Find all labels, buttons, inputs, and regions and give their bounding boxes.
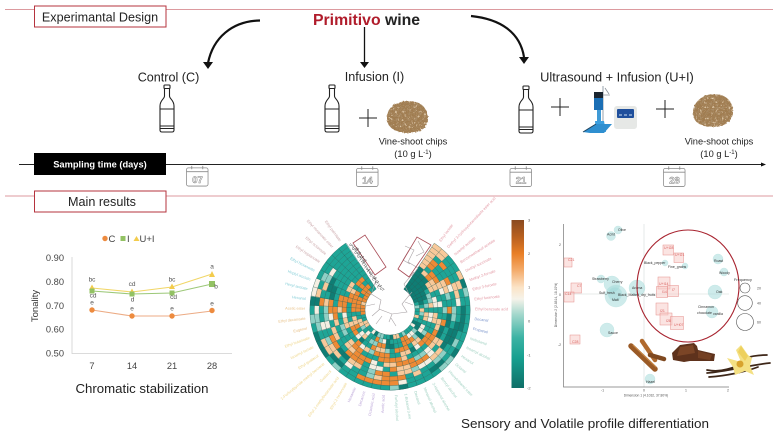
attribute labels: Black_Malted_dry_fruits [618,293,656,297]
heading: Main results [34,191,166,212]
significance letters: b [214,284,218,290]
line chart: tonality [30,234,232,371]
significance letters: cd [170,294,177,301]
icon: ultrasound homogenizer [583,86,637,133]
compound labels: left half: Ethyl octanoate [304,236,327,256]
icon: infusion bottle [325,85,339,132]
icon: chocolate pieces [672,343,715,362]
compound labels: right half: Benzeneethanol acetate [459,239,496,264]
icon: plus [551,98,569,116]
compound labels: left half: Isoamyl lactate [290,345,314,360]
significance letters: e [210,300,214,308]
chart legend [102,234,155,245]
heading: Main results: Main results [68,195,136,209]
sample codes: U+I21 [675,253,684,257]
sample codes [565,246,684,344]
significance letters: bc [169,276,176,284]
compound labels: left half: Hexanoic [347,387,357,403]
sample labels: C 21 [371,277,380,285]
caption: Chromatic stabilization: Chromatic stabilization [76,382,209,396]
label: chips dose (U+I): (10 g L [700,149,738,159]
frequency legend [734,278,761,330]
compound labels: right half: Diethyl 3-hydroxybutanedioate ester acid [446,196,497,249]
sample codes: U+I28 [664,246,673,250]
compound labels: left half [278,219,386,418]
x axis tick labels: 7 [89,361,95,371]
compound labels: left half: Ethyl butanoate [284,336,310,349]
compound labels: left half: Octanoic acid [368,393,376,416]
compound labels: left half: Eugenol [293,326,308,334]
attribute labels: Roast [714,259,723,263]
compound labels: right half: Ethyl lactate [439,224,454,243]
attribute labels: Oak [716,290,723,294]
axis tick labels: 0 [643,388,645,392]
teal attribute bubbles [597,226,728,384]
label: Control: Control (C) [138,70,199,84]
icon: calendar day 21: 21 [516,176,527,186]
series: C [89,307,215,319]
compound labels: left half: Ethyl guaiacol [297,354,320,370]
attribute labels: vanilla [713,312,723,316]
heatmap colour bar [512,218,531,390]
x axis tick labels [89,361,217,371]
heatmap colour bar: 2 [528,251,531,256]
red highlight ellipse [637,230,739,342]
x axis tick labels: 14 [127,361,137,371]
frequency legend: 40 [757,302,761,306]
arrow: to ultrasound + infusion [471,16,529,64]
axis tick labels: 2 [559,243,561,247]
icon: vanilla flower and pods [707,345,770,377]
y axis title: Tonality [30,290,41,322]
sample codes: I7 [672,288,675,292]
frequency legend: Frequency [734,278,752,282]
central dendrogram [366,241,424,326]
red sample squares [564,245,684,344]
reference lines [564,224,729,387]
axes [72,257,232,354]
significance letters: e [130,306,134,312]
compound labels: left half: Heptyl acetate [287,269,311,282]
sample labels: I 07 [366,269,373,276]
compound labels: right half: Isoamyl alcohol [465,346,491,361]
sample codes: C14 [565,292,571,296]
compound labels: right half: 2-Heptanol alcohol [431,382,451,412]
sample codes: C21 [568,258,574,262]
attribute labels: Sauce [608,331,618,335]
compound labels: right half: Ethyl 3-furoate [472,282,497,292]
sample labels: U+I 21 [351,246,362,256]
title: Primitivo wine: Primitivo wine [313,12,420,29]
compound labels: left half: Acetic acid [381,395,386,413]
compound labels: left half: Ethyl nonanoate ester [306,219,334,249]
attribute labels: Strawberry [592,277,609,281]
x axis tick labels: 28 [207,361,217,371]
compound labels: left half: Ethyl 2-methylbutanoate acid [307,376,340,418]
compound labels: right half: Octanol [454,363,467,374]
attribute labels: Acrid [607,232,615,236]
sample labels: C 14 [374,281,382,288]
compound labels: left half: Guaiacol [319,369,332,383]
icon: calendar day 14 [356,166,378,187]
axis tick labels: -1 [601,388,604,392]
significance letters: a [210,264,214,270]
label: chips dose (infusion): Vine-shoot chips [379,136,448,146]
heatmap colour bar: 1 [528,284,531,290]
compound labels: left half: Hexyl acetate [285,282,308,291]
significance letters: e [170,306,174,312]
sample codes: U+I07 [674,323,683,327]
scatter plot: sensory map [554,224,761,398]
y axis tick labels: 0.80 [46,277,64,287]
axis tick labels: 1 [685,388,687,392]
compound labels: right half: Ethyl furanoate [474,295,500,301]
significance letters: cd [90,292,97,300]
attribute labels: Fine_grains [668,265,687,269]
series: I [90,281,215,296]
label: Sampling time [34,153,166,175]
compound labels: left half: Hexanal [292,295,306,301]
compound labels: left half: Acetic ester [285,307,306,311]
heatmap colour bar: 3 [528,218,531,222]
red box: sample cluster [353,235,386,275]
attribute labels: Olive [618,228,626,232]
icon: calendar day 07 [186,166,208,186]
timeline arrow [19,162,766,166]
label: chips dose (U+I): ) [735,149,738,159]
label: Infusion: Infusion (I) [345,70,404,84]
icon: plus [656,100,674,118]
compound labels: right half: 1-Butanol 3-me [403,393,412,420]
attribute labels: Woody [719,271,730,275]
attribute labels: chocolate [697,311,712,315]
compound labels: right half: Furfuryl alcohol [394,395,399,421]
compound labels: right half: Decanal [474,317,489,323]
heading: Experimantal Design: Experimantal Design [42,10,158,24]
sample codes: U+I14 [659,282,668,286]
compound labels: right half: Propanal [472,327,488,334]
compound labels: right half: Diethyl succinate [465,257,492,273]
section divider lines [5,10,773,196]
axis tick labels: 2 [727,388,729,392]
icon: vine-shoot chips (infusion) [387,101,428,133]
frequency legend: 60 [757,320,761,324]
compound labels: right half: Nonanol alcohol [423,387,437,414]
sample labels: C 07 [376,285,385,292]
red box: compound cluster [398,237,431,277]
compound labels: right half: Isoamyl acetate [453,236,476,256]
axis tick labels [558,243,729,392]
caption: Sensory and Volatile profile differentiation: Sensory and Volatile profile differentiation [461,416,709,431]
chart legend: U+I [140,234,155,245]
series: U+I [89,271,215,294]
attribute labels: Sulf_fresh [599,291,615,295]
sample labels: I 28 [359,258,366,265]
compound labels: left half: Ethyl hexanoate [289,257,315,273]
frequency legend: 20 [757,286,761,290]
compound labels: right half: Hexanol [460,354,474,366]
attribute labels: Cinnamon [698,305,714,309]
attribute labels: Malt [612,298,619,302]
axis tick labels: 0 [559,293,561,297]
sample labels [348,242,385,292]
compound labels: right half: Phenylethanol ester [447,370,474,398]
axis titles: Dimension 1 (4.1032, 37.80%) [624,394,668,398]
sample labels: U+I 07 [356,254,367,263]
compound labels: left half: Ethyl decanoate [278,317,306,324]
heatmap cells [279,199,501,421]
y axis title: Dimension 2 (2.8814, 18.10%) [554,283,558,327]
label: chips dose (infusion): (10 g L [394,149,432,159]
significance letters [89,264,218,312]
compound labels: right half: Decanol [413,391,421,405]
compound labels: right half: Methyl 2-furoate [469,269,496,282]
y axis tick labels [46,253,64,358]
sample labels: I 21 [361,262,368,268]
label: chips dose (U+I): -1 [729,150,735,156]
attribute labels: Aroma [632,286,642,290]
y axis tick labels: 0.60 [46,324,64,334]
significance letters: cd [129,281,136,288]
arrow: to control [203,20,260,69]
heatmap colour bar: 0 [528,318,531,324]
label: Ultrasound + Infusion: Ultrasound + Infusion (U+I) [540,70,694,84]
heatmap colour bar: -1 [527,352,531,358]
compound labels: left half: Ethyl 2-hexenoate [329,382,348,410]
significance letters: e [90,300,94,306]
significance letters: d [131,296,135,304]
label: chips dose (infusion): -1 [423,150,429,156]
sample codes: C28 [572,340,578,344]
icon: control bottle [160,85,174,132]
label: chips dose (infusion): ) [429,149,432,159]
x axis tick labels: 21 [167,361,177,371]
compound labels: left half: Decanoic [358,390,366,407]
axes [564,224,729,387]
heatmap colour bar: -2 [527,386,531,390]
axis tick labels: -2 [558,343,561,347]
icon: calendar day 07: 07 [192,175,203,186]
heading: Experimantal Design [34,6,166,27]
compound labels: left half: 1-Furfurylpyrrole methyl benzene [280,362,325,401]
sample codes: I28 [666,319,671,323]
sample codes: I14 [662,290,667,294]
compound labels: right half: Ethyl benzoate acid [475,307,508,311]
label: Sampling time: Sampling time (days) [53,160,147,170]
compound labels: left half: Ethyl heptanoate [295,245,321,264]
y axis tick labels: 0.90 [46,253,64,263]
label: chips dose (U+I): Vine-shoot chips [685,136,754,146]
significance letters: bc [89,276,96,284]
compound labels: right half: Benzyl alcohol [440,377,458,399]
sample codes: I21 [660,309,665,313]
attribute labels: Cherry [612,280,623,284]
sample labels: I 14 [364,265,371,272]
sample labels: U+I 28 [348,242,360,252]
compound labels: right half [394,196,508,421]
chart legend: I [127,234,130,245]
attribute labels: Hazel [646,380,655,384]
icon: calendar day 28 [663,166,685,187]
icon: calendar day 21 [510,166,532,187]
compound labels: right half: Isobutanol [469,337,487,346]
y axis tick labels: 0.70 [46,301,64,311]
sample codes: C7 [577,284,582,288]
icon: vine-shoot chips (U+I) [693,94,733,127]
attribute labels: Black_pepper [644,261,666,265]
compound labels: left half: Ethyl palmitate [324,220,342,242]
chart legend: C [108,234,116,245]
icon: U+I bottle [519,86,533,133]
icon: calendar day 14: 14 [362,176,373,186]
icon: cinnamon sticks [631,341,664,369]
attribute labels [592,228,730,384]
sample labels: U+I 14 [353,250,365,259]
icon: plus [359,109,377,127]
arrow: to infusion [360,27,369,68]
sample labels: C 28 [369,273,377,281]
y axis tick labels: 0.50 [46,348,64,358]
icon: calendar day 28: 28 [669,176,680,186]
circular heatmap [278,196,508,421]
